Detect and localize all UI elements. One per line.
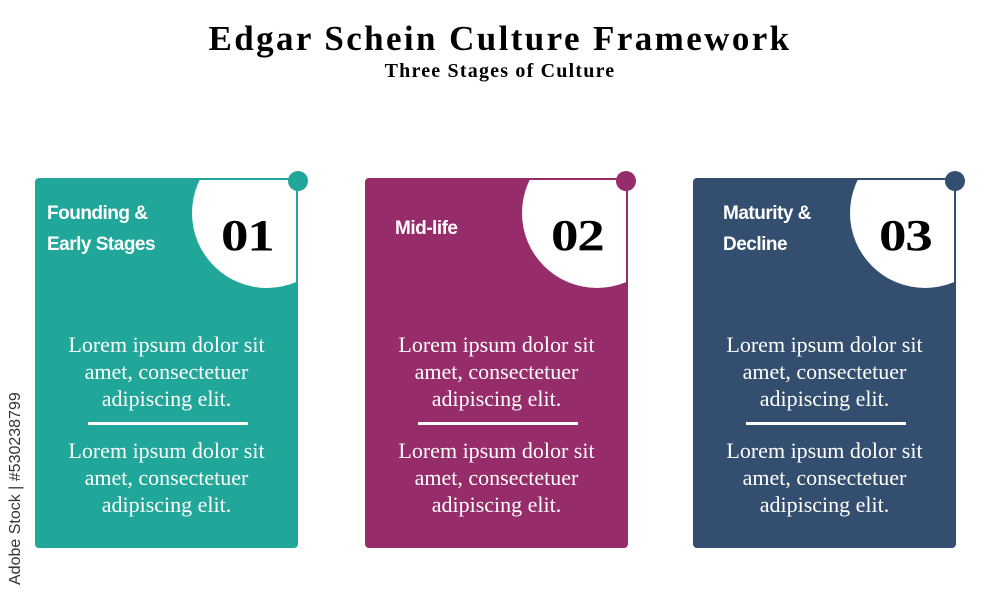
text 1b: adipiscing elit. — [102, 492, 231, 517]
text 3a: Lorem ipsum dolor sit — [726, 332, 923, 357]
text 2b — [398, 438, 595, 517]
text 1a: adipiscing elit. — [102, 386, 231, 411]
text 3b: amet, consectetuer — [743, 465, 906, 490]
text 2a: amet, consectetuer — [415, 359, 578, 384]
text 2a: adipiscing elit. — [432, 386, 561, 411]
panel: card 2 — [365, 178, 628, 548]
panel: card 3 — [693, 178, 956, 548]
heading 3 — [723, 203, 811, 255]
side text: Adobe Stock | #530238799 — [7, 392, 24, 585]
title: Edgar Schein Culture Framework — [208, 19, 792, 58]
heading 1: Early Stages — [47, 234, 155, 255]
number 02: 02 — [551, 211, 604, 260]
text 1a: amet, consectetuer — [85, 359, 248, 384]
text 2b: adipiscing elit. — [432, 492, 561, 517]
number 03: 03 — [879, 211, 932, 260]
dot 2 — [616, 171, 636, 191]
panel: card 1 — [35, 178, 298, 548]
text 3a — [726, 332, 923, 411]
heading 1 — [47, 203, 155, 255]
text 1b — [68, 438, 265, 517]
heading 3: Maturity & — [723, 203, 811, 224]
heading 3: Decline — [723, 234, 787, 255]
text 3b: adipiscing elit. — [760, 492, 889, 517]
subtitle: Three Stages of Culture — [385, 60, 615, 82]
dot 1 — [288, 171, 308, 191]
text 2a — [398, 332, 595, 411]
text 3b: Lorem ipsum dolor sit — [726, 438, 923, 463]
dot 3 — [945, 171, 965, 191]
text 2b: amet, consectetuer — [415, 465, 578, 490]
text 1a: Lorem ipsum dolor sit — [68, 332, 265, 357]
text 3a: adipiscing elit. — [760, 386, 889, 411]
text 1b: Lorem ipsum dolor sit — [68, 438, 265, 463]
number 01: 01 — [221, 211, 274, 260]
heading 1: Founding & — [47, 203, 148, 224]
text 3b — [726, 438, 923, 517]
text 2b: Lorem ipsum dolor sit — [398, 438, 595, 463]
text 2a: Lorem ipsum dolor sit — [398, 332, 595, 357]
heading 2: Mid-life — [395, 218, 458, 239]
text 1b: amet, consectetuer — [85, 465, 248, 490]
text 3a: amet, consectetuer — [743, 359, 906, 384]
text 1a — [68, 332, 265, 411]
